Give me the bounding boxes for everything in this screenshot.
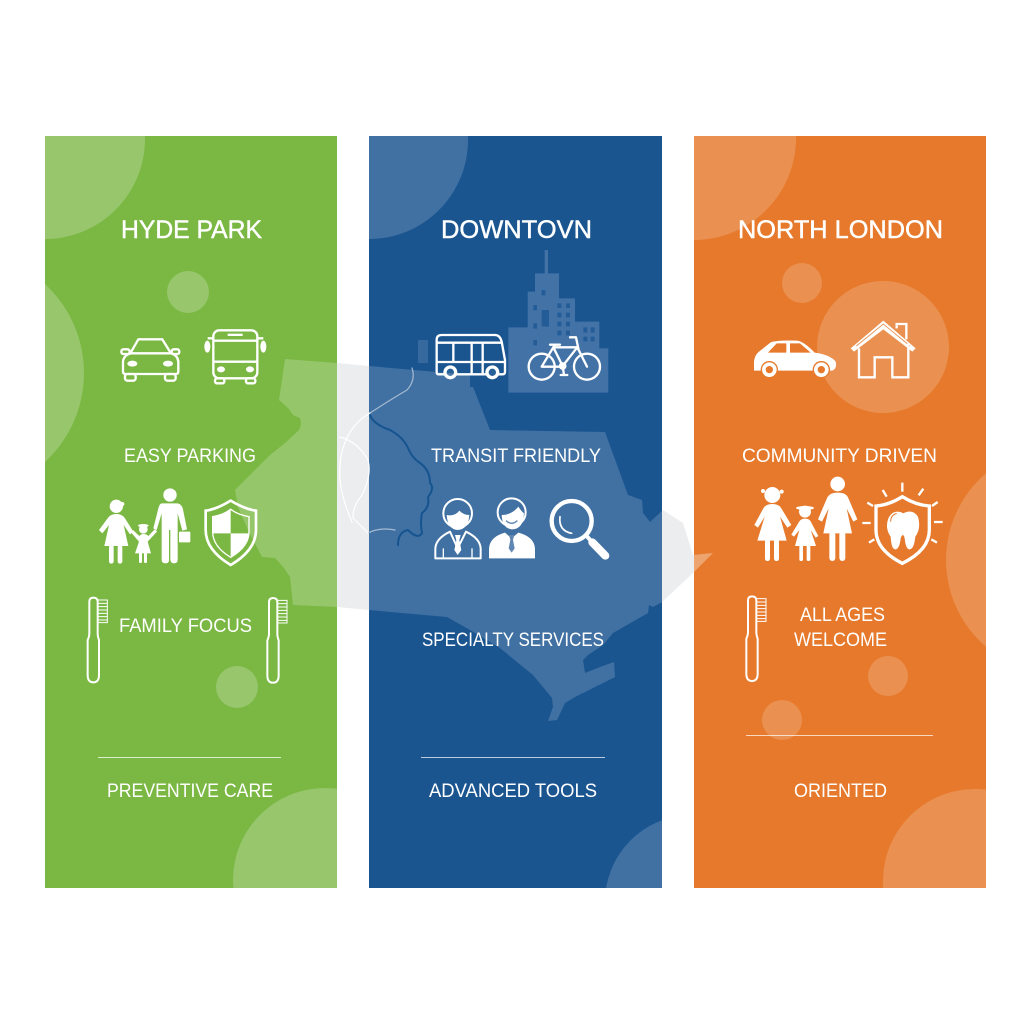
- icon: dentist two: [489, 498, 535, 558]
- icon: car side: [754, 341, 836, 378]
- icon: dentist one: [435, 499, 481, 558]
- decorative circles: blue panel: [369, 136, 662, 888]
- label: Community Driven: COMMUNITY DRIVEN: [742, 446, 937, 467]
- label: Transit Friendly: TRANSIT FRIENDLY: [431, 446, 601, 467]
- icon: family of three: [754, 477, 857, 561]
- label: All Ages Welcome: WELCOME: [794, 630, 887, 651]
- label: Oriented: ORIENTED: [794, 781, 887, 802]
- icon: bicycle: [529, 337, 600, 380]
- map silhouette behind panels: [235, 359, 713, 721]
- label: All Ages Welcome: ALL AGES: [800, 605, 885, 626]
- icons and labels: Downtown: [422, 250, 608, 651]
- icon: car front: [121, 339, 179, 381]
- label: Easy Parking: EASY PARKING: [124, 446, 256, 467]
- icon: shield: [206, 501, 256, 565]
- icon: tooth shield: [862, 483, 943, 563]
- icon: bus front: [204, 330, 266, 383]
- panel: North London: [694, 136, 986, 888]
- icon: toothbrush: [746, 596, 766, 681]
- label: Family Focus: FAMILY FOCUS: [119, 616, 252, 637]
- panel: Hyde Park: [45, 136, 337, 888]
- icon: house: [851, 321, 916, 377]
- label: Preventive Care: PREVENTIVE CARE: [107, 781, 273, 802]
- icon: toothbrush left: [88, 598, 107, 682]
- heading: Hyde Park: HYDE PARK: [121, 216, 262, 244]
- label: Specialty Services: SPECIALTY SERVICES: [422, 630, 604, 651]
- map rivers: [340, 340, 432, 545]
- label: All Ages Welcome: [794, 605, 887, 651]
- icons and labels: Hyde Park: [88, 330, 287, 683]
- icon: toothbrush right: [267, 598, 287, 683]
- decorative circles: orange panel: [694, 136, 986, 888]
- icon: magnifying glass: [552, 501, 605, 556]
- heading: North London: NORTH LONDON: [738, 216, 943, 244]
- label: Advanced Tools: ADVANCED TOOLS: [429, 781, 597, 802]
- icon: city skyline: [508, 250, 608, 393]
- icon: transit bus: [437, 335, 505, 378]
- panel: Downtown: [369, 136, 662, 888]
- icon: family: [99, 488, 190, 564]
- icons and labels: North London: [742, 321, 943, 681]
- map overlay across panels: [235, 340, 713, 721]
- decorative circles: green panel: [45, 136, 337, 888]
- heading: Downtown: DOWNTOVN: [441, 216, 592, 244]
